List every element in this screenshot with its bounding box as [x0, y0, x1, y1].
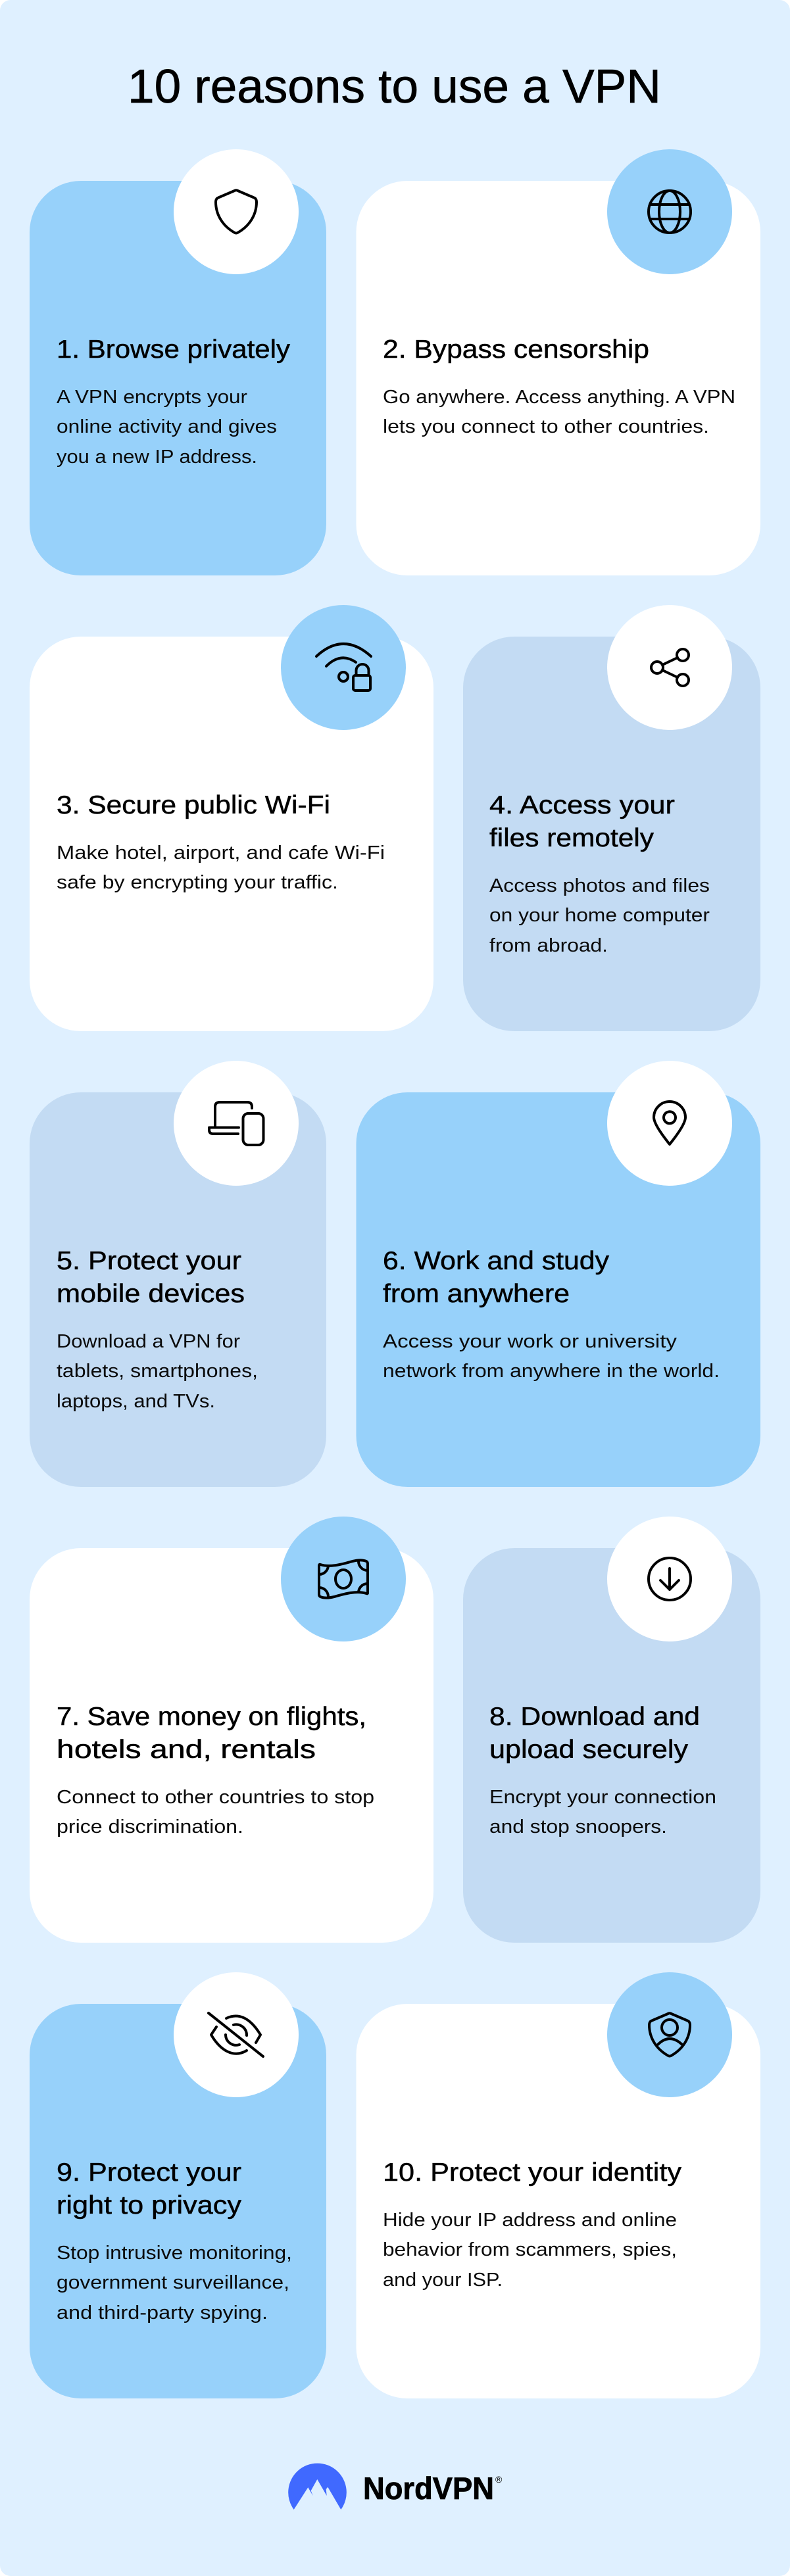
icon: download arrow [607, 1517, 732, 1641]
wordmark: NordVPN [363, 2471, 494, 2506]
heading [57, 1247, 245, 1308]
body text: government surveillance, [57, 2272, 289, 2293]
body text: and third-party spying. [57, 2302, 268, 2323]
body text: and stop snoopers. [489, 1816, 667, 1837]
heading: 6. Work and study [383, 1247, 610, 1275]
heading: 1. Browse privately [57, 335, 291, 364]
body text: on your home computer [489, 905, 710, 926]
card background [357, 181, 760, 575]
body text: Go anywhere. Access anything. A VPN [383, 387, 735, 408]
panel: 3. Secure public Wi-Fi [30, 605, 433, 1031]
body text: Stop intrusive monitoring, [57, 2243, 292, 2264]
heading [489, 1703, 700, 1764]
body text: behavior from scammers, spies, [383, 2239, 677, 2260]
body text: price discrimination. [57, 1816, 243, 1837]
panel: 8. Download and upload securely [463, 1517, 760, 1943]
body text [57, 1787, 374, 1837]
heading: 7. Save money on flights, [57, 1703, 366, 1731]
card background [30, 1548, 433, 1943]
body text [489, 1787, 716, 1837]
heading: right to privacy [57, 2191, 242, 2220]
heading: from anywhere [383, 1280, 570, 1308]
icon: crossed-out eye [174, 1972, 299, 2097]
registered mark: ® [495, 2474, 503, 2485]
body text [57, 2243, 292, 2323]
heading: 9. Protect your [57, 2158, 241, 2187]
icon: laptop and phone [174, 1061, 299, 1186]
card background [30, 181, 326, 575]
icon: wifi with lock [281, 605, 406, 730]
icon: banknote [281, 1517, 406, 1641]
heading: 10. Protect your identity [383, 2158, 682, 2187]
body text: you a new IP address. [57, 447, 257, 468]
heading: 5. Protect your [57, 1247, 241, 1275]
panel: 10. Protect your identity [357, 1972, 760, 2398]
panel: 4. Access your files remotely [463, 605, 760, 1031]
body text: Hide your IP address and online [383, 2210, 677, 2231]
body text [383, 1331, 720, 1382]
heading: 3. Secure public Wi-Fi [57, 791, 330, 819]
body text: network from anywhere in the world. [383, 1361, 720, 1382]
body text [57, 387, 277, 468]
heading: hotels and, rentals [57, 1736, 316, 1764]
heading: upload securely [489, 1736, 689, 1764]
icon: shield with person [607, 1972, 732, 2097]
body text: laptops, and TVs. [57, 1391, 215, 1412]
icon: mountain logo mark [288, 2464, 347, 2510]
panel: 7. Save money [30, 1517, 433, 1943]
panel: 6. Work and study from anywhere [357, 1061, 760, 1487]
body text: and your ISP. [383, 2270, 503, 2291]
body text: tablets, smartphones, [57, 1361, 258, 1382]
heading [489, 791, 675, 852]
body text: online activity and gives [57, 416, 277, 437]
body text [489, 875, 710, 956]
heading: files remotely [489, 824, 654, 852]
panel: 1. Browse privately [30, 149, 326, 575]
icon: globe [607, 149, 732, 274]
card background [463, 1548, 760, 1943]
body text: Download a VPN for [57, 1331, 240, 1352]
body text: Connect to other countries to stop [57, 1787, 374, 1808]
heading: 8. Download and [489, 1703, 700, 1731]
body text: Make hotel, airport, and cafe Wi-Fi [57, 842, 385, 863]
heading [57, 2158, 242, 2220]
panel: 9. Protect your right to privacy [30, 1972, 326, 2398]
body text [383, 2210, 677, 2291]
heading [383, 1247, 610, 1308]
heading: 4. Access your [489, 791, 675, 819]
body text [383, 387, 735, 437]
body text: from abroad. [489, 935, 608, 956]
card background [463, 637, 760, 1031]
panel: 2. Bypass censorship [357, 149, 760, 575]
card background [30, 2004, 326, 2398]
card background [30, 637, 433, 1031]
icon: share [607, 605, 732, 730]
icon: shield [174, 149, 299, 274]
body text: Access photos and files [489, 875, 710, 896]
title: 10 reasons to use a VPN [128, 61, 661, 113]
heading: 2. Bypass censorship [383, 335, 649, 364]
card background [357, 1092, 760, 1487]
body text: lets you connect to other countries. [383, 416, 709, 437]
body text [57, 1331, 258, 1412]
heading [57, 1703, 366, 1764]
icon: location pin [607, 1061, 732, 1186]
panel: 5. Protect your mobile devices [30, 1061, 326, 1487]
logo: NordVPN [288, 2464, 503, 2510]
card background [357, 2004, 760, 2398]
card background [30, 1092, 326, 1487]
body text: A VPN encrypts your [57, 387, 247, 408]
body text [57, 842, 385, 893]
body text: Access your work or university [383, 1331, 678, 1352]
body text: Encrypt your connection [489, 1787, 716, 1808]
body text: safe by encrypting your traffic. [57, 872, 338, 893]
heading: mobile devices [57, 1280, 245, 1308]
